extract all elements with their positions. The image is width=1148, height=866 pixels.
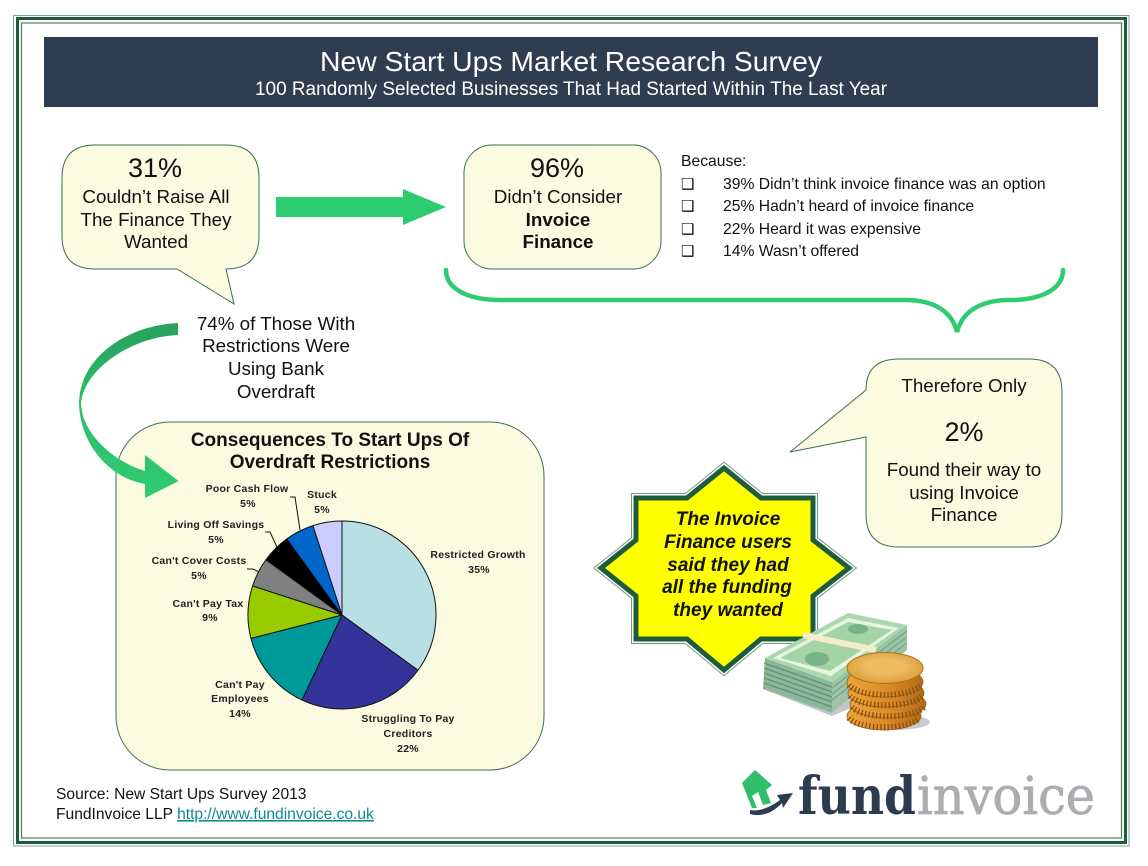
pie labels: 9% — [202, 612, 218, 624]
title banner — [44, 37, 1098, 107]
text: 74% using bank overdraft — [197, 313, 355, 402]
box: 96% did not consider invoice finance — [464, 145, 661, 269]
banknote stack — [763, 613, 907, 716]
reasons list: ❑ — [681, 242, 694, 260]
logo: fundinvoice: fund — [798, 766, 916, 827]
source note: Source: New Start Ups Survey 2013 — [56, 786, 306, 803]
reasons list: ❑ — [681, 175, 694, 193]
reasons list: 39% Didn’t think invoice finance was an option — [723, 176, 1046, 193]
subtitle: 100 Randomly Selected Businesses That Had Started Within The Last Year — [255, 79, 888, 100]
callout: therefore only 2%: 2% — [944, 417, 984, 447]
reasons list: Because: — [681, 153, 746, 170]
text: 74% using bank overdraft: Overdraft — [237, 381, 316, 402]
reasons list — [681, 153, 1046, 260]
text: 74% using bank overdraft: 74% of Those With — [197, 313, 355, 334]
curved arrow — [79, 323, 178, 498]
pie labels: 5% — [240, 498, 256, 510]
callout: therefore only 2%: Therefore Only — [901, 375, 1027, 396]
pie labels: Can't Cover Costs — [152, 555, 246, 567]
callout: therefore only 2%: using Invoice — [909, 482, 1019, 503]
panel heading: Overdraft Restrictions — [230, 452, 430, 473]
pie labels: Employees — [211, 693, 269, 705]
callout: 31% could not raise finance: 31% — [128, 153, 182, 183]
callout: therefore only 2%: Found their way to — [887, 459, 1041, 480]
pie chart — [248, 521, 436, 709]
logo icon — [742, 770, 793, 815]
reasons list: 22% Heard it was expensive — [723, 221, 921, 238]
panel: consequences — [116, 422, 544, 770]
star badge: The Invoice — [676, 509, 781, 530]
star badge: Finance users — [664, 532, 792, 553]
star badge: said they had — [667, 555, 789, 576]
box: 96% did not consider invoice finance: Finance — [523, 231, 593, 252]
pie labels: Creditors — [384, 728, 432, 740]
pie labels: Struggling To Pay — [361, 713, 455, 725]
pie labels: 5% — [191, 570, 207, 582]
pie labels: Living Off Savings — [168, 519, 264, 531]
pie labels: 14% — [229, 708, 251, 720]
title: New Start Ups Market Research Survey — [320, 46, 822, 77]
pie labels: 22% — [397, 743, 419, 755]
reasons list: 14% Wasn’t offered — [723, 243, 859, 260]
reasons list: ❑ — [681, 197, 694, 215]
callout: therefore only 2% — [790, 359, 1062, 547]
box: 96% did not consider invoice finance: Invoice — [526, 209, 590, 230]
star badge: all the funding — [662, 577, 792, 598]
box: 96% did not consider invoice finance: 96% — [530, 153, 584, 183]
callout: 31% could not raise finance: Couldn’t Raise All — [82, 186, 230, 207]
star badge: they wanted — [673, 600, 783, 621]
source note — [56, 786, 374, 823]
logo: fundinvoice — [742, 766, 1095, 827]
star badge — [601, 468, 849, 670]
text: 74% using bank overdraft: Restrictions Were — [202, 335, 350, 356]
pie labels: Poor Cash Flow — [206, 483, 289, 495]
pie labels: 35% — [468, 564, 490, 576]
box: 96% did not consider invoice finance: Didn’t Consider — [494, 186, 622, 207]
gold coins — [847, 652, 930, 730]
logo: fundinvoice: invoice — [917, 767, 1095, 827]
panel heading — [191, 430, 470, 473]
callout: 31% could not raise finance — [62, 145, 259, 304]
pie labels: 5% — [314, 504, 330, 516]
callout: 31% could not raise finance: The Finance They — [80, 209, 232, 230]
text: 74% using bank overdraft: Using Bank — [228, 358, 325, 379]
pie labels: Can't Pay Tax — [173, 598, 243, 610]
reasons list: 25% Hadn’t heard of invoice finance — [723, 198, 974, 215]
pie labels: 5% — [208, 534, 224, 546]
pie leader lines — [247, 497, 300, 572]
icon: money stack and coins — [763, 613, 930, 730]
callout: therefore only 2%: Finance — [931, 504, 997, 525]
pie labels: Stuck — [307, 489, 337, 501]
reasons list: ❑ — [681, 220, 694, 238]
pie labels: Can't Pay — [215, 679, 265, 691]
pie labels — [152, 483, 526, 755]
curly brace — [446, 270, 1063, 332]
callout: 31% could not raise finance: Wanted — [124, 231, 188, 252]
source note: FundInvoice LLP http://www.fundinvoice.co.uk — [56, 806, 374, 823]
panel heading: Consequences To Start Ups Of — [191, 430, 470, 451]
pie labels: Restricted Growth — [430, 549, 526, 561]
arrow: right — [276, 189, 446, 225]
